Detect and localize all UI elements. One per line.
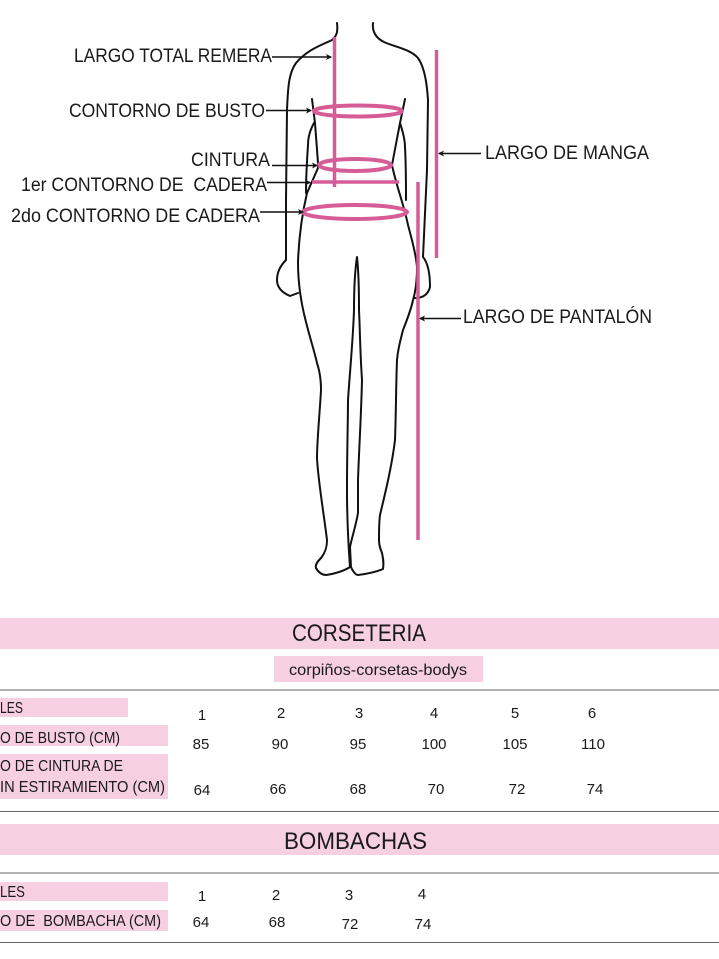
pink measurement lines: [303, 37, 436, 540]
corseteria table values: 90: [272, 736, 288, 753]
bombachas table values: 1: [198, 888, 206, 905]
corseteria table values: 6: [588, 705, 596, 722]
corseteria table values: 1: [198, 707, 206, 724]
corseteria table values: 64: [194, 782, 210, 799]
corseteria table values: 105: [502, 736, 528, 753]
corseteria table labels: O DE BUSTO (CM): [0, 730, 120, 747]
body figure outline: [277, 23, 430, 575]
corseteria table values: 3: [355, 705, 363, 722]
corseteria table values: 72: [509, 781, 525, 798]
measurement labels: [11, 46, 652, 328]
corseteria table values: 95: [350, 736, 366, 753]
bombachas table labels: LES: [0, 884, 25, 901]
bombachas table values: 74: [415, 916, 431, 933]
measurement labels: LARGO DE PANTALÓN: [463, 306, 652, 328]
measurement labels: LARGO DE MANGA: [485, 143, 649, 164]
corseteria table labels: LES: [0, 700, 23, 717]
bombachas table labels: [0, 882, 168, 931]
corseteria heading band: [0, 618, 719, 649]
table lines: [0, 690, 719, 942]
arrows: [260, 57, 481, 318]
measurement labels: 2do CONTORNO DE CADERA: [11, 206, 260, 227]
corseteria subheading: corpiños-corsetas-bodys: [289, 662, 467, 679]
bombachas heading band: BOMBACHAS: [284, 828, 427, 855]
corseteria table values: 74: [587, 781, 603, 798]
bombachas table values: 2: [272, 887, 280, 904]
corseteria table values: 5: [511, 705, 519, 722]
corseteria table values: 68: [350, 781, 366, 798]
corseteria table labels: O DE CINTURA DE: [0, 758, 123, 775]
measurement labels: CONTORNO DE BUSTO: [69, 101, 265, 122]
corseteria heading band: CORSETERIA: [292, 620, 426, 647]
corseteria table values: [193, 705, 605, 799]
measurement labels: LARGO TOTAL REMERA: [74, 46, 272, 67]
corseteria table values: 110: [581, 736, 605, 753]
bombachas heading band: [0, 824, 719, 855]
bombachas table values: 72: [342, 916, 358, 933]
corseteria table values: 85: [193, 736, 209, 753]
corseteria subheading: [274, 656, 483, 682]
corseteria table values: 70: [428, 781, 444, 798]
measurement labels: 1er CONTORNO DE CADERA: [21, 175, 267, 196]
corseteria table labels: IN ESTIRAMIENTO (CM): [0, 779, 165, 796]
corseteria table values: 66: [270, 781, 286, 798]
corseteria table values: 4: [430, 705, 438, 722]
measurement labels: CINTURA: [191, 150, 270, 171]
corseteria table labels: [0, 698, 168, 799]
bombachas table values: 4: [418, 886, 426, 903]
bombachas table values: 68: [269, 914, 285, 931]
bombachas table values: [193, 886, 431, 933]
bombachas table labels: O DE BOMBACHA (CM): [0, 913, 161, 930]
bombachas table values: 3: [345, 887, 353, 904]
bombachas table values: 64: [193, 914, 209, 931]
corseteria table values: 100: [421, 736, 447, 753]
corseteria table values: 2: [277, 705, 285, 722]
